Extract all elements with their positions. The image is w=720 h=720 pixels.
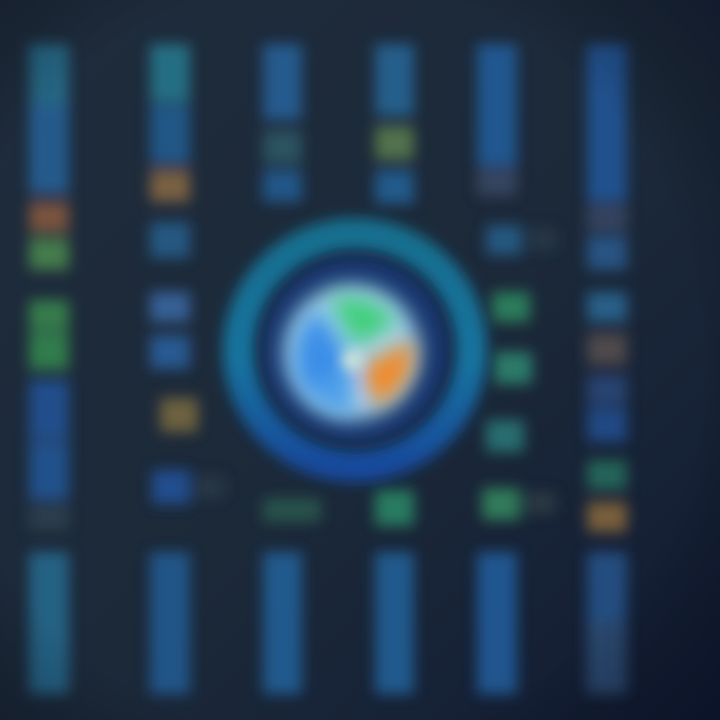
- column 3 blocks: [263, 44, 321, 694]
- column 5 blocks: [477, 44, 556, 694]
- column 4 blocks: [375, 44, 414, 694]
- globe icon: [284, 284, 420, 420]
- central ring: [239, 234, 471, 466]
- column 1 blocks: [29, 44, 69, 694]
- column 6 blocks: [587, 44, 627, 694]
- column 2 blocks: [150, 44, 225, 694]
